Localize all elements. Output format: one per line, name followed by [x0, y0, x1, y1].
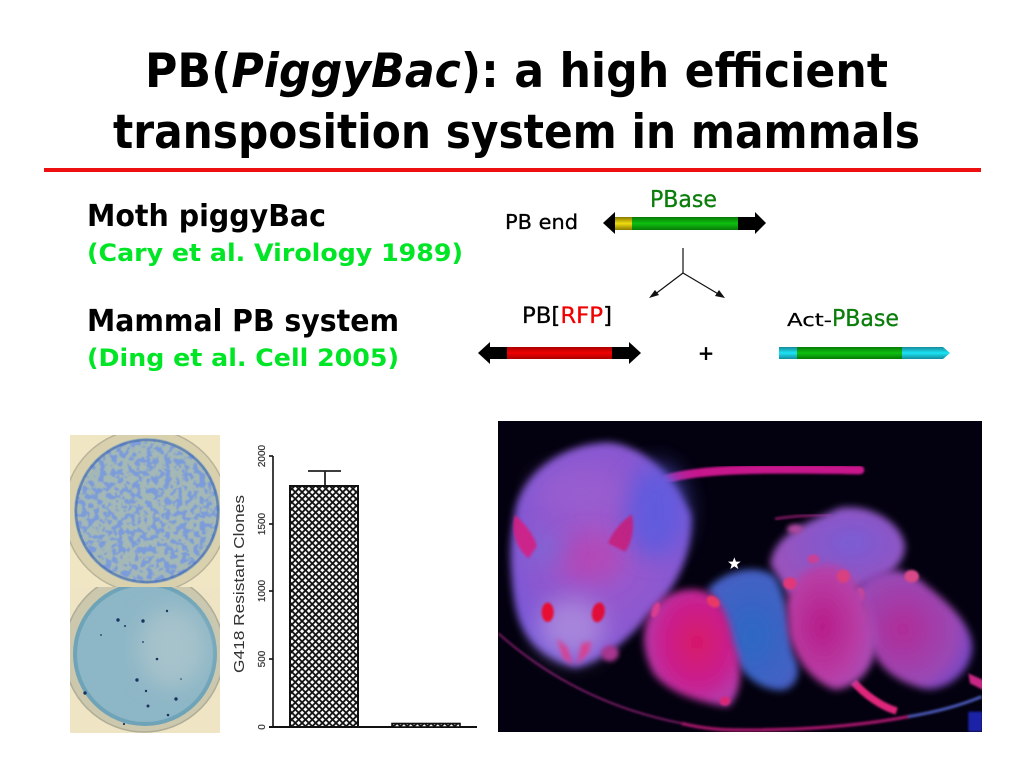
tail behind pups: [775, 515, 832, 519]
text block: mammal PB system: Mammal PB system: [87, 304, 399, 339]
title divider: [44, 168, 981, 172]
plus sign: +: [698, 341, 714, 365]
text block: moth piggyBac: [87, 199, 463, 267]
pup: blue non-fluorescent: [707, 569, 798, 690]
y axis tick labels: 1000: [257, 579, 268, 602]
title: transposition system in mammals: [113, 105, 920, 160]
label: PBase: PBase: [650, 187, 717, 213]
nose: [557, 638, 573, 665]
bar: second group: [392, 724, 460, 727]
label: PB[RFP]: PB[RFP]: [522, 304, 612, 329]
error bar: [308, 471, 341, 486]
text block: moth piggyBac: Moth piggyBac: [87, 199, 326, 234]
pup: pink right: [856, 570, 972, 689]
diagram: Act-PBase helper: [779, 306, 950, 359]
photo: sparse colony plate: [70, 587, 220, 733]
text block: moth piggyBac: (Cary et al. Virology 1989): [87, 239, 463, 267]
label: PB end: PB end: [505, 210, 578, 234]
diagram: PB end and PBase construct: [505, 187, 766, 234]
text block: mammal PB system: [87, 304, 399, 372]
y axis title: G418 Resistant Clones: [231, 495, 248, 673]
y axis tick labels: [257, 444, 268, 730]
y axis tick labels: 1500: [257, 512, 268, 535]
arrow: split into two components: [649, 248, 725, 298]
photo: dense colony plate: [70, 435, 220, 587]
diagram: PB[RFP] transposon: [478, 304, 641, 364]
pup: pink left: [644, 589, 740, 707]
mother's tail: [667, 469, 860, 479]
bar chart: G418 resistant clones: [231, 444, 477, 730]
label: Act-PBase: [787, 306, 899, 332]
dish rim: [498, 633, 982, 730]
eyes: [542, 603, 554, 622]
label: Act-PBase: PBase: [832, 306, 899, 332]
arrow: RFP construct: [478, 342, 641, 364]
bar: first group: [290, 486, 358, 727]
dish corner glow: [968, 712, 982, 732]
y axis tick labels: 2000: [257, 444, 268, 467]
photo: fluorescent mice under UV: [498, 421, 983, 732]
title: [113, 44, 920, 160]
pup: middle tail: [853, 682, 897, 711]
y axis tick labels: 0: [257, 724, 268, 730]
text block: mammal PB system: (Ding et al. Cell 2005): [87, 344, 399, 372]
y axis tick labels: 500: [257, 650, 268, 667]
arrow: Act-PBase construct: [779, 347, 950, 359]
label: Act-PBase: Act-: [787, 310, 832, 331]
adult mouse: [511, 442, 691, 668]
icon: white star marker: [728, 557, 741, 569]
ears: [513, 515, 537, 558]
pup: pink middle: [783, 554, 877, 690]
arrow: PBase construct: [603, 212, 766, 234]
pup: right tail: [968, 673, 983, 690]
axes: [269, 456, 477, 728]
pup: purple back: [770, 507, 905, 595]
title: PB(PiggyBac): a high efficient: [145, 44, 888, 99]
